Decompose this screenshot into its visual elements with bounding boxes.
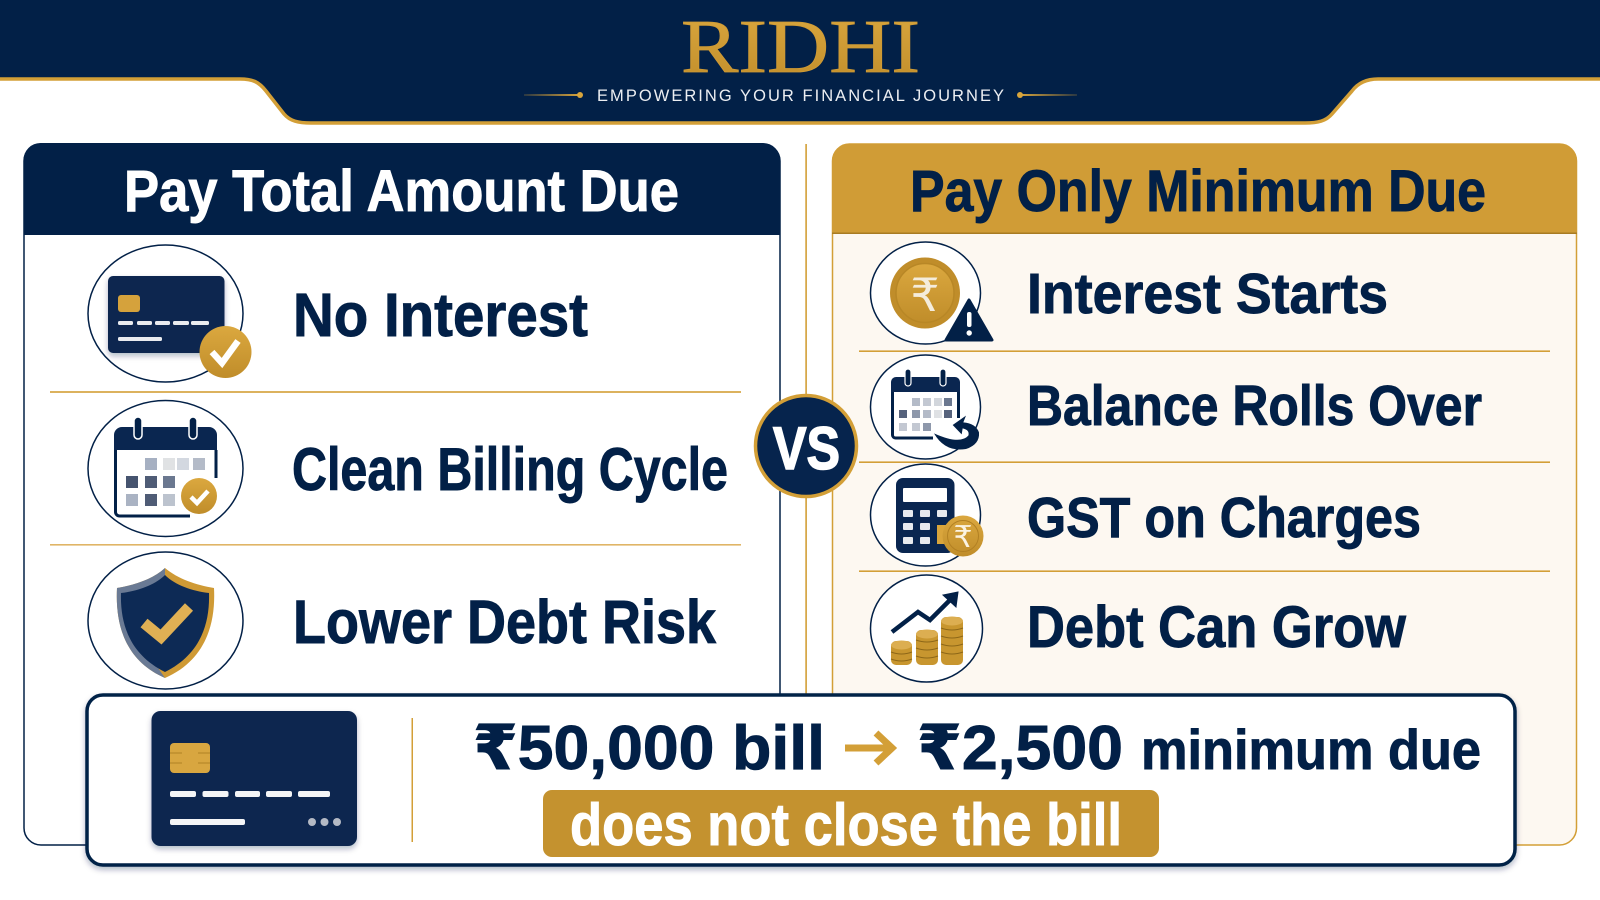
row: lower debt risk — [88, 552, 716, 689]
panel: pay total amount due — [24, 143, 780, 845]
icon: shield with check — [117, 568, 214, 678]
icon: rupee coin with warning: ₹ — [910, 269, 940, 321]
icon: credit card with check — [108, 276, 252, 378]
panel heading — [832, 144, 1577, 234]
brand title: RIDHI — [681, 5, 920, 89]
tagline: EMPOWERING YOUR FINANCIAL JOURNEY — [597, 87, 1004, 105]
icon: rising arrow and coin stacks — [891, 592, 963, 665]
row: gst on charges: GST on Charges — [1027, 486, 1421, 550]
row: debt can grow — [870, 575, 1407, 682]
row: clean billing cycle — [88, 400, 728, 536]
icon: calendar with rollover arrow — [891, 369, 979, 449]
panel heading — [24, 143, 780, 235]
icon: calculator with rupee coin: ₹ — [953, 521, 973, 554]
row: balance rolls over: Balance Rolls Over — [1027, 374, 1482, 438]
VS badge — [756, 396, 856, 496]
row: no interest: No Interest — [293, 281, 588, 349]
row: no interest — [88, 245, 588, 382]
row: debt can grow: Debt Can Grow — [1027, 595, 1407, 660]
row: clean billing cycle: Clean Billing Cycle — [292, 436, 728, 503]
panel heading: Pay Total Amount Due — [124, 159, 679, 224]
row: gst on charges — [870, 464, 1421, 566]
arrow — [845, 733, 892, 763]
row: interest starts — [870, 242, 1388, 344]
icon: large credit card — [152, 711, 357, 846]
text: bill amount: ₹50,000 bill — [473, 714, 825, 783]
callout: bill example — [87, 695, 1515, 865]
highlight: does not close the bill: does not close the bill — [570, 792, 1122, 858]
panel heading: Pay Only Minimum Due — [910, 159, 1486, 224]
text: minimum amount: ₹2,500 — [917, 714, 1123, 783]
row: interest starts: Interest Starts — [1027, 262, 1388, 326]
header banner — [0, 0, 1600, 123]
icon: rupee coin with warning — [890, 258, 992, 340]
center divider line — [805, 144, 807, 694]
VS badge: VS — [773, 415, 840, 482]
row: lower debt risk: Lower Debt Risk — [293, 588, 716, 656]
panel: pay only minimum due — [832, 144, 1577, 845]
row: balance rolls over — [870, 355, 1482, 459]
icon: calculator with rupee coin — [896, 478, 984, 556]
text: minimum due: minimum due — [1141, 718, 1481, 781]
icon: calendar with check — [114, 417, 217, 516]
